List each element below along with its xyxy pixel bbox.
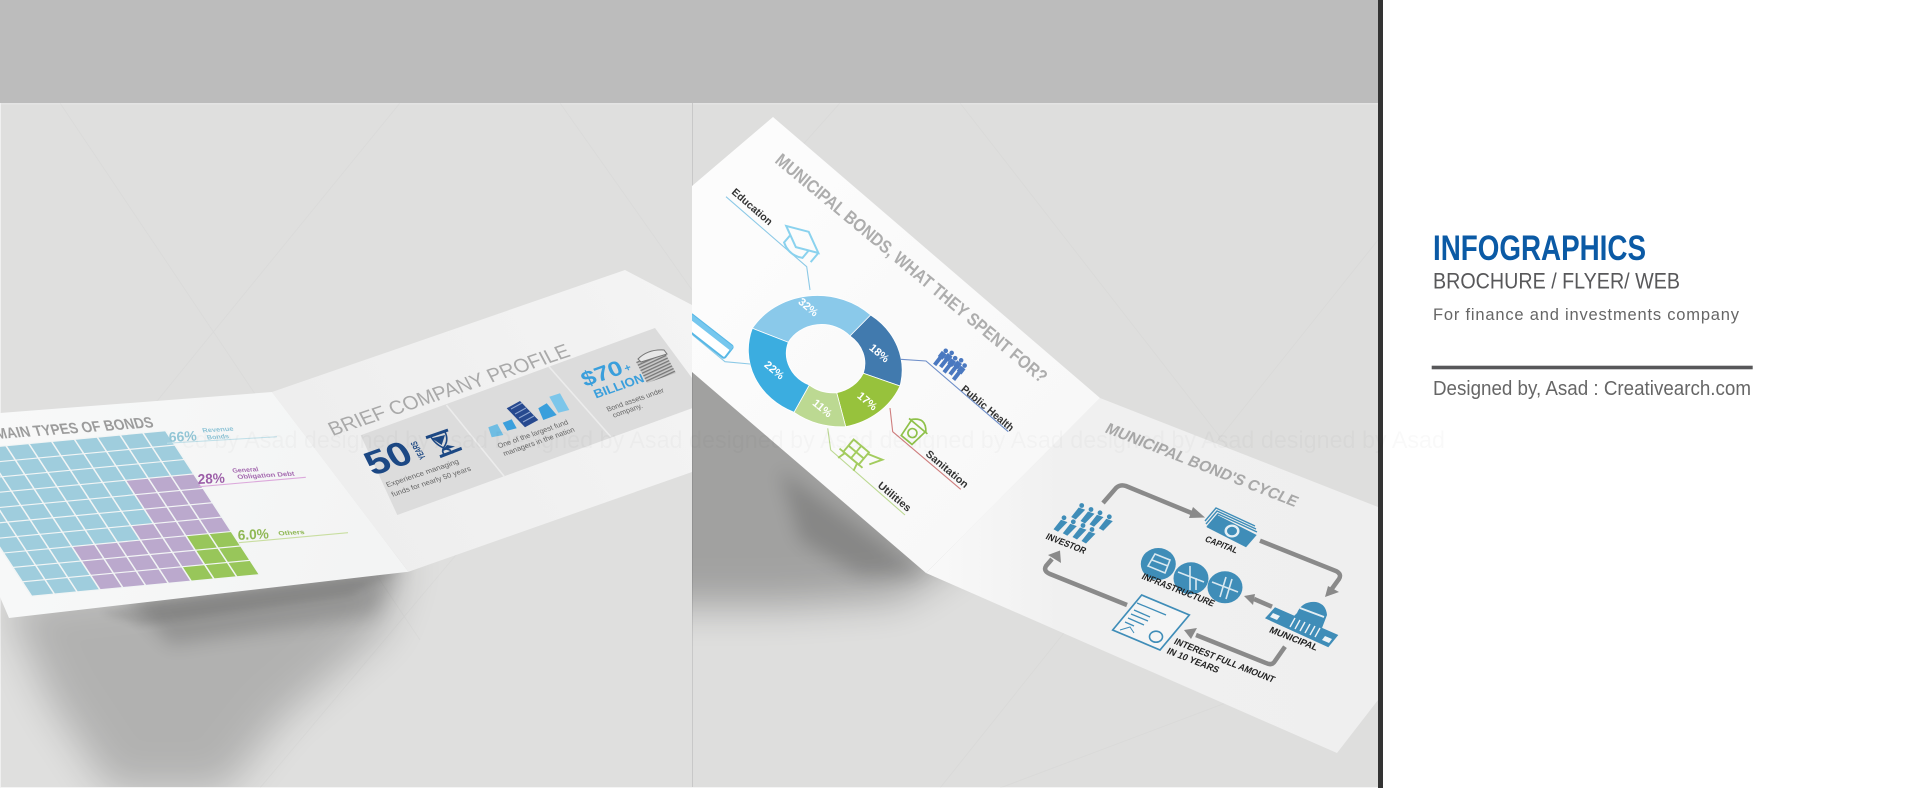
top grey band <box>0 0 1378 103</box>
label: capital: CAPITAL <box>1203 534 1240 555</box>
stat: 50 years <box>357 430 473 498</box>
arrow: municipal to bond <box>1184 628 1285 664</box>
watermark text: ed by Asad designed by Asad Designed by Asad designed by Asad designed by Asad designed by Asad designed by Asad <box>182 427 1445 454</box>
icon: recycling bin <box>900 418 928 446</box>
left photo background <box>0 103 692 787</box>
donut percent labels <box>762 296 891 420</box>
icon: hourglass <box>426 430 462 457</box>
label: municipal: MUNICIPAL <box>1267 624 1321 652</box>
arrow: investor to capital <box>1103 485 1205 518</box>
sidebar panel <box>1383 0 1905 788</box>
stat: 70 billion: $70 <box>577 355 627 391</box>
arrow: capital to municipal <box>1260 541 1340 597</box>
donut percent labels: 11% <box>810 397 834 420</box>
callout: education: Education <box>729 186 775 228</box>
icons: infrastructure circles <box>1141 548 1242 603</box>
subtitle: brochure flyer web: BROCHURE / FLYER/ WEB <box>1433 268 1680 293</box>
label: infrastructure: INFRASTRUCTURE <box>1140 571 1217 608</box>
donut percent labels: 32% <box>796 296 820 320</box>
right brochure <box>640 117 1378 753</box>
callout: public health: Public Health <box>959 383 1016 434</box>
icon: city buildings <box>488 393 569 437</box>
legend: 6.0% others: Others <box>277 529 306 537</box>
legend: 6.0% others: 6.0% <box>237 525 270 543</box>
right leaf of brochure <box>272 270 692 572</box>
left brochure <box>0 270 692 788</box>
callout: public health <box>901 346 1016 434</box>
shadow under right brochure <box>692 372 954 626</box>
stat: 50 years: Experience managing <box>384 457 460 489</box>
icon: money stack <box>636 350 676 383</box>
callout: sanitation: Sanitation <box>923 448 971 491</box>
stat: largest fund managers: managers in the nation <box>501 425 576 458</box>
credit line: Designed by, Asad : Creativearch.com <box>1433 378 1751 400</box>
shadow under left brochure <box>5 555 408 788</box>
legend: 28% general obligation debt <box>197 466 306 487</box>
lower leaf of brochure <box>926 398 1378 753</box>
legend: 28% general obligation debt: Obligation Debt <box>236 471 297 481</box>
icon: municipal building <box>1265 602 1338 647</box>
heading: municipal bonds spent for: MUNICIPAL BONDS, WHAT THEY SPENT FOR? <box>771 150 1051 387</box>
icon: capital money <box>1205 508 1257 547</box>
waffle chart <box>0 431 260 596</box>
callout: education <box>726 186 825 290</box>
legend: 28% general obligation debt: General <box>231 466 260 475</box>
sidebar text block <box>1432 229 1753 400</box>
icon: utility machine <box>838 438 885 471</box>
stat: 50 years: YEARS <box>408 440 428 461</box>
stat: 70 billion: company. <box>611 401 644 419</box>
icon: promissory note document <box>1113 595 1189 650</box>
stat: largest fund managers: One of the largest fund <box>496 418 570 450</box>
stat: 50 years: 50 <box>357 434 420 483</box>
right photo background <box>692 103 1378 787</box>
callout: utilities <box>828 428 914 515</box>
panel: company stats <box>361 328 692 515</box>
left leaf of brochure <box>0 392 408 618</box>
legend: 28% general obligation debt: 28% <box>197 470 226 487</box>
stat: 70 billion <box>577 350 676 419</box>
icon: investor group <box>1054 503 1113 544</box>
label: in 10 years: IN 10 YEARS <box>1165 645 1222 675</box>
icon: graduation cap <box>783 224 820 263</box>
callout: utilities: Utilities <box>875 480 914 515</box>
label: investor: INVESTOR <box>1044 531 1089 556</box>
upper leaf of brochure <box>692 117 1100 573</box>
description: finance company: For finance and investments company <box>1433 306 1740 324</box>
stat: 70 billion: Bond assets under <box>605 386 666 413</box>
legend: 66% revenue bonds: 66% <box>168 428 198 445</box>
donut percent labels: 17% <box>855 390 879 414</box>
legend: 66% revenue bonds <box>167 427 277 444</box>
callout: sanitation <box>890 408 971 491</box>
stat: largest fund managers <box>488 393 576 458</box>
heading: brief company profile: BRIEF COMPANY PROFILE <box>324 340 574 440</box>
dark vertical divider <box>1378 0 1383 788</box>
arrow: bond to investor <box>1045 550 1127 605</box>
donut chart <box>748 295 902 427</box>
donut percent labels: 18% <box>867 342 891 366</box>
arrow: municipal to infrastructure <box>1244 594 1272 607</box>
legend: 66% revenue bonds: Bonds <box>206 433 231 441</box>
heading: municipal bond's cycle: MUNICIPAL BOND'S CYCLE <box>1102 421 1301 510</box>
legend: 66% revenue bonds: Revenue <box>201 426 235 434</box>
donut percent labels: 22% <box>762 359 786 383</box>
stat: 70 billion: BILLION <box>591 371 646 401</box>
legend: 6.0% others <box>238 528 348 544</box>
icon: people <box>933 348 967 381</box>
divider line <box>1432 366 1753 369</box>
icon: train <box>692 313 734 359</box>
label: interest full amount: INTEREST FULL AMOUNT <box>1172 636 1278 684</box>
stat: 70 billion: + <box>622 362 633 375</box>
stat: 50 years: funds for nearly 50 years <box>390 464 473 498</box>
callout: transport <box>692 313 750 364</box>
title: infographics: INFOGRAPHICS <box>1433 229 1646 268</box>
